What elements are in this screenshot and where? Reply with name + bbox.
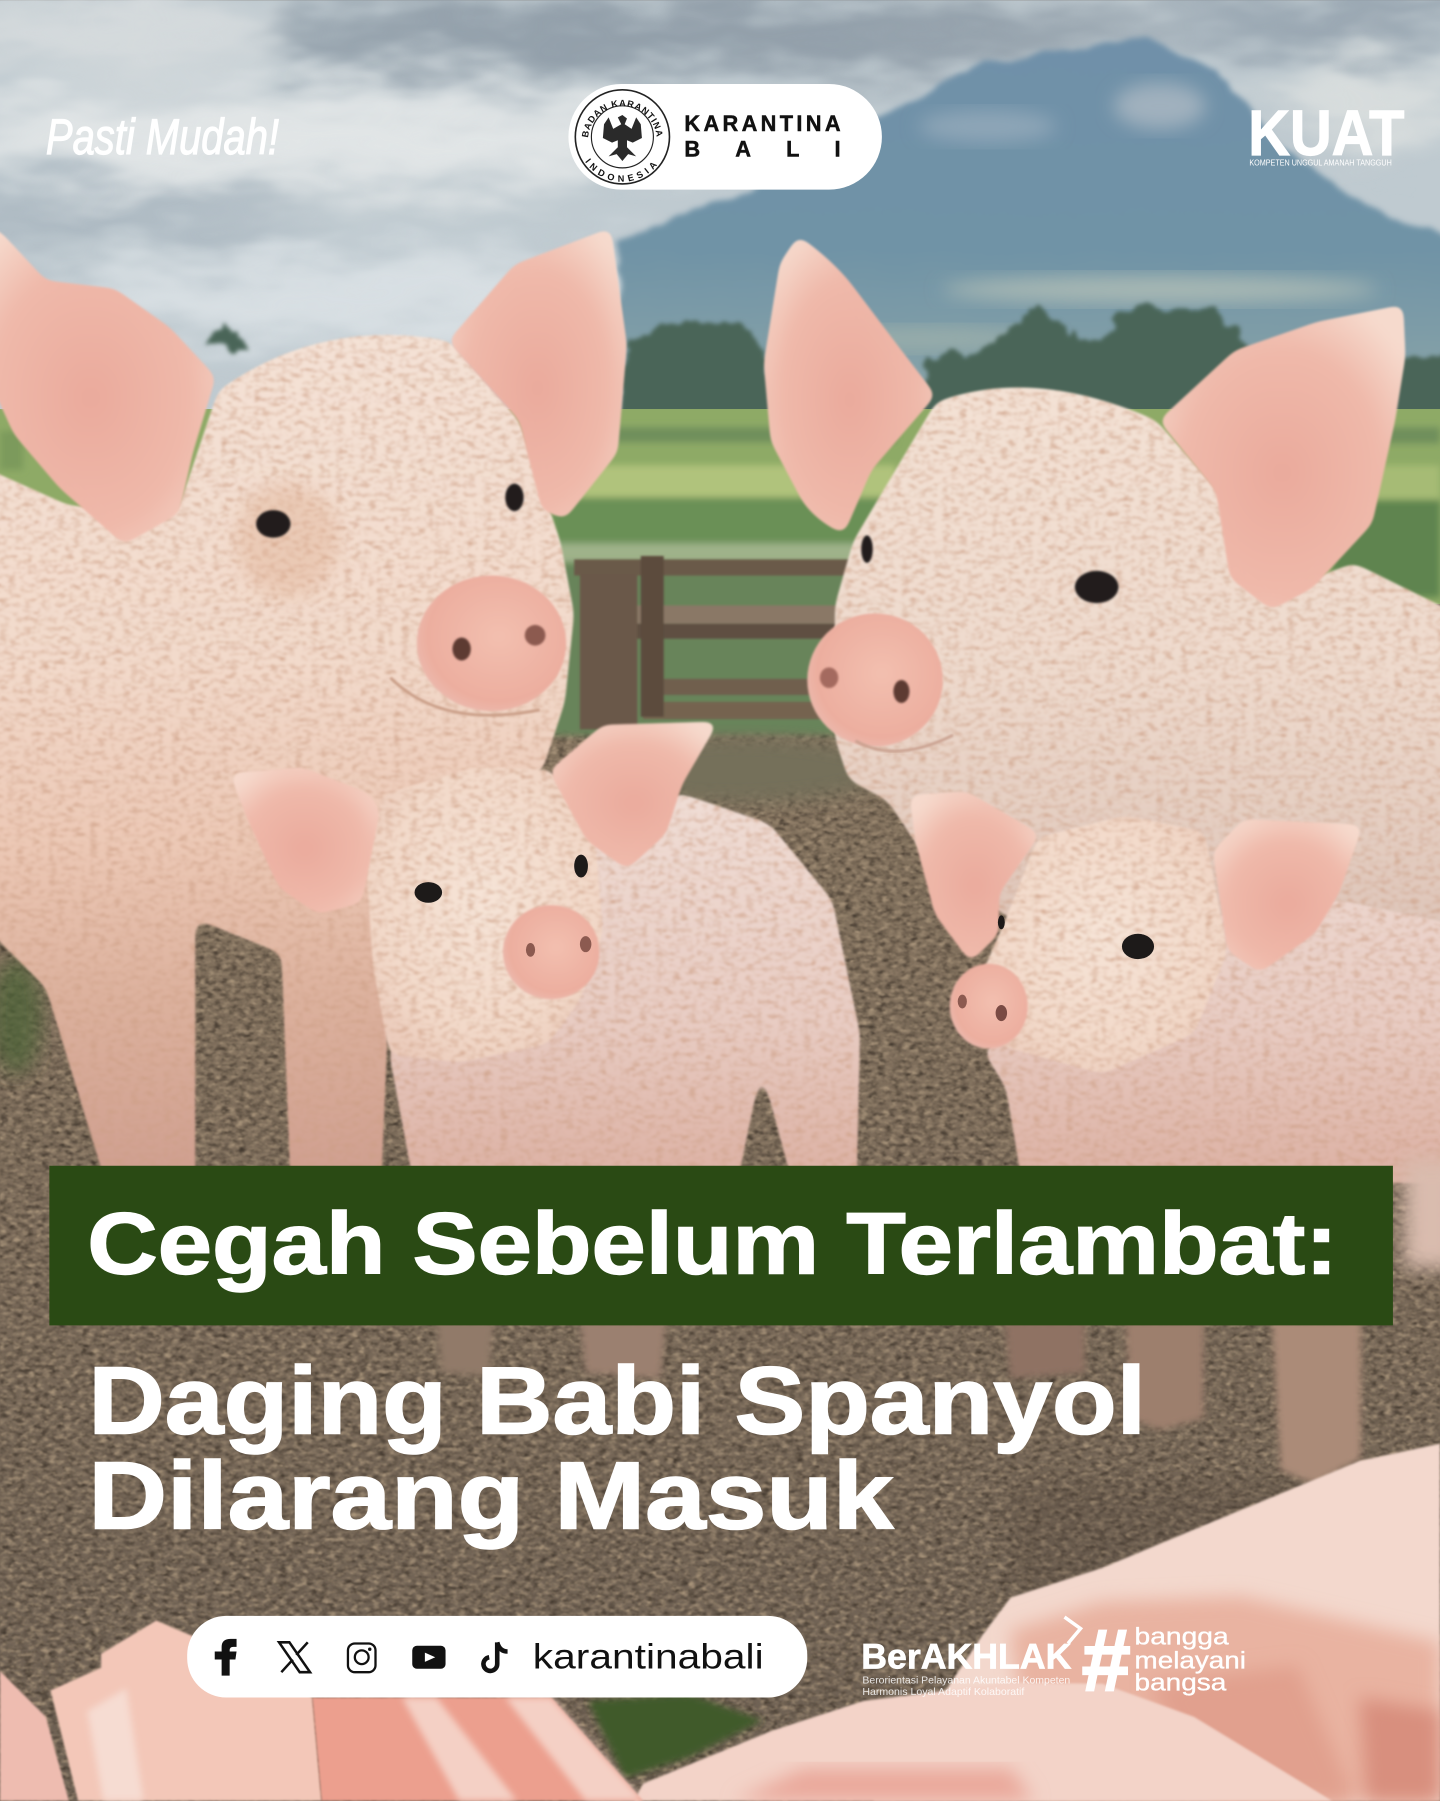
BerAKHLAK logo [861, 1617, 1081, 1698]
left adult snout [417, 576, 566, 711]
logo wordmark: KARANTINA [684, 111, 841, 136]
brand: KUAT: KUAT [1248, 97, 1404, 169]
BerAKHLAK logo: BerAKHLAK [861, 1637, 1072, 1677]
green fields [0, 409, 1440, 604]
icon: X [279, 1642, 310, 1672]
right adult eyes [861, 535, 1118, 603]
handle: karantinabali [533, 1637, 764, 1677]
left adult right ear [448, 228, 627, 519]
left adult eye patch [235, 483, 339, 597]
icon: tiktok [483, 1642, 508, 1671]
left piglet body [389, 794, 860, 1183]
left piglet head [366, 767, 603, 1062]
emblem: Badan Karantina Indonesia seal: INDONESIA [585, 158, 658, 182]
title line one: Cegah Sebelum Terlambat: [87, 1196, 1338, 1293]
left adult mouth [390, 678, 540, 715]
BerAKHLAK logo: Berorientasi Pelayanan Akuntabel Kompeten [862, 1676, 1070, 1687]
logo wordmark [684, 111, 841, 161]
right piglet eyes [998, 915, 1154, 959]
social media pill [187, 1616, 807, 1697]
pig legs below banner [436, 1160, 1440, 1484]
headline [88, 1348, 1146, 1550]
bangga melayani bangsa logo [1081, 1613, 1246, 1710]
right adult mouth [856, 735, 953, 751]
headline: Dilarang Masuk [88, 1444, 895, 1550]
right piglet right ear [1213, 819, 1363, 973]
bangga melayani bangsa logo: bangsa [1135, 1670, 1227, 1697]
bangga melayani bangsa logo: melayani [1135, 1648, 1246, 1675]
tree line [204, 308, 1440, 425]
pork meat: left pieces [0, 1620, 643, 1801]
wooden fence [574, 556, 850, 729]
herb garnish [588, 1694, 762, 1778]
icon: instagram [348, 1643, 376, 1672]
ground [0, 563, 1440, 1801]
left piglet snout [503, 905, 599, 999]
brand: KUAT: KOMPETEN UNGGUL AMANAH TANGGUH [1249, 159, 1392, 168]
left adult head and body [0, 335, 574, 1183]
right piglet left ear [909, 791, 1040, 963]
right piglet head [976, 816, 1228, 1074]
bangga melayani bangsa logo: # [1081, 1613, 1130, 1710]
mountain [574, 37, 1440, 391]
left piglet right ear [549, 721, 719, 869]
right adult left ear [764, 236, 936, 534]
BerAKHLAK logo: Harmonis Loyal Adaptif Kolaboratif [862, 1687, 1025, 1698]
right adult right ear [1159, 305, 1406, 610]
pig: right adult [764, 236, 1440, 953]
right piglet snout [950, 964, 1028, 1049]
title banner [49, 1166, 1393, 1325]
icon: youtube [412, 1646, 446, 1669]
right adult snout [807, 613, 943, 747]
left adult eyes [256, 484, 524, 538]
left adult left ear [0, 218, 216, 545]
pig: left adult [0, 218, 627, 1183]
left piglet eyes [415, 855, 588, 903]
headline: Daging Babi Spanyol [88, 1348, 1146, 1454]
piglet: left [230, 721, 860, 1183]
emblem: Badan Karantina Indonesia seal [574, 89, 670, 185]
brand: Pasti Mudah: Pasti Mudah! [46, 108, 279, 165]
emblem: Badan Karantina Indonesia seal: BADAN KARANTINA [582, 100, 662, 138]
pork meat: right slab [634, 1444, 1440, 1801]
logo wordmark: BALI [684, 136, 841, 161]
icon: facebook [215, 1639, 237, 1676]
right adult head and body [835, 387, 1440, 953]
right piglet body [983, 900, 1440, 1183]
logo pill: Karantina Bali [568, 84, 882, 190]
bangga melayani bangsa logo: bangga [1135, 1624, 1229, 1651]
piglet: right [909, 791, 1440, 1183]
left piglet left ear [230, 767, 380, 914]
sky with clouds [0, 0, 1440, 460]
